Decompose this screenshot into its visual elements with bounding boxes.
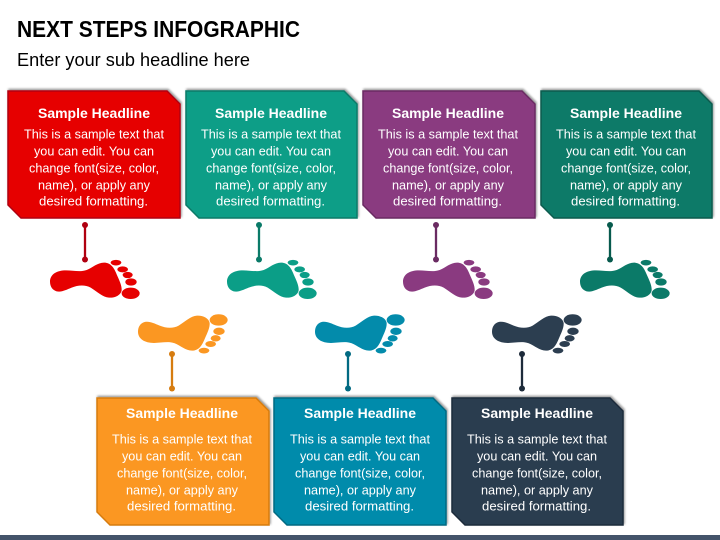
panel: orange step: This is a sample text that [112, 432, 253, 446]
icon: green footprint [580, 260, 670, 299]
panel: blue step [274, 398, 446, 525]
panel: teal step: you can edit. You can [211, 144, 331, 158]
panel: purple step: name), or apply any [392, 178, 505, 192]
panel: orange step [97, 398, 269, 525]
panel: navy step: This is a sample text that [467, 432, 608, 446]
panel: navy step: you can edit. You can [477, 450, 597, 464]
connector: teal [256, 222, 262, 262]
panel: purple step: change font(size, color, [383, 162, 513, 176]
panel: purple step: This is a sample text that [378, 128, 519, 142]
connector: blue [345, 351, 351, 392]
panel: teal step [186, 91, 357, 218]
panel: navy step [452, 398, 623, 525]
panel: purple step: Sample Headline [392, 105, 504, 121]
panel: blue step: you can edit. You can [300, 450, 420, 464]
panel: teal step: desired formatting. [216, 194, 325, 208]
panel: green step: desired formatting. [571, 194, 680, 208]
panel: blue step: desired formatting. [305, 500, 414, 514]
panel: orange step: Sample Headline [126, 405, 238, 421]
panel: green step: name), or apply any [570, 178, 683, 192]
panel: navy step: desired formatting. [482, 500, 591, 514]
icon: purple footprint [403, 260, 493, 299]
panel: teal step: This is a sample text that [201, 128, 342, 142]
panel: orange step: desired formatting. [127, 500, 236, 514]
icon: orange footprint [138, 314, 228, 353]
panel: navy step: name), or apply any [481, 484, 594, 498]
panel: teal step: name), or apply any [215, 178, 328, 192]
panel: navy step: change font(size, color, [472, 466, 602, 480]
panel: orange step: you can edit. You can [122, 450, 242, 464]
panel: green step: you can edit. You can [566, 144, 686, 158]
panel: purple step: you can edit. You can [388, 144, 508, 158]
icon: blue footprint [315, 314, 405, 353]
panel: orange step: name), or apply any [126, 484, 239, 498]
panel: green step: change font(size, color, [561, 162, 691, 176]
connector: green [607, 222, 613, 262]
panel: teal step: change font(size, color, [206, 162, 336, 176]
panel: teal step: Sample Headline [215, 105, 327, 121]
icon: navy footprint [492, 314, 582, 353]
connector: orange [169, 351, 175, 392]
panel: blue step: change font(size, color, [295, 466, 425, 480]
panel: red step [8, 91, 180, 218]
panel: red step: desired formatting. [39, 194, 148, 208]
panel: purple step: desired formatting. [393, 194, 502, 208]
panel: red step: you can edit. You can [34, 144, 154, 158]
icon: red footprint [50, 260, 140, 299]
connector: purple [433, 222, 439, 262]
connector: red [82, 222, 88, 262]
panel: red step: Sample Headline [38, 105, 150, 121]
panel: red step: This is a sample text that [24, 128, 165, 142]
panel: orange step: change font(size, color, [117, 466, 247, 480]
panel: blue step: Sample Headline [304, 405, 416, 421]
title: NEXT STEPS INFOGRAPHIC [17, 16, 300, 42]
panel: purple step [363, 91, 535, 218]
panel: red step: name), or apply any [38, 178, 151, 192]
panel: red step: change font(size, color, [29, 162, 159, 176]
subtitle: Enter your sub headline here [17, 50, 250, 70]
panel: green step [541, 91, 712, 218]
panel: green step: This is a sample text that [556, 128, 697, 142]
connector: navy [519, 351, 525, 392]
footer bar [0, 535, 720, 540]
panel: navy step: Sample Headline [481, 405, 593, 421]
panel: blue step: name), or apply any [304, 484, 417, 498]
panel: green step: Sample Headline [570, 105, 682, 121]
icon: teal footprint [227, 260, 317, 299]
panel: blue step: This is a sample text that [290, 432, 431, 446]
